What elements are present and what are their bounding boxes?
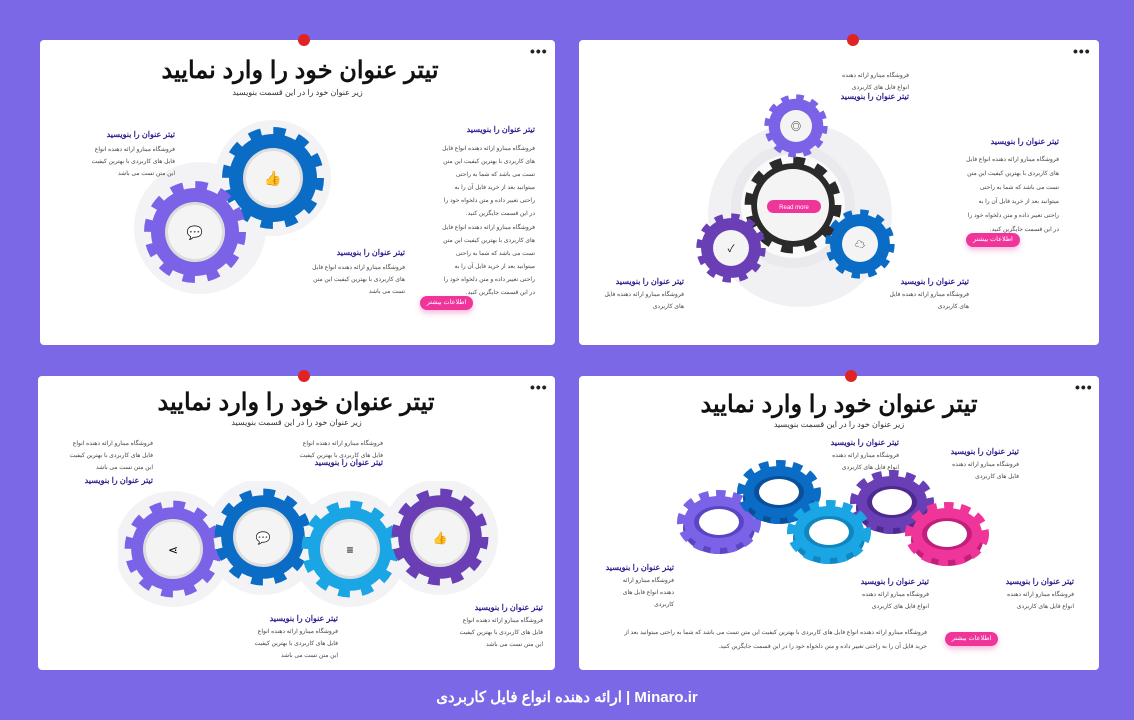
panel: bottom-left slide: تیتر عنوان را بنویسید — [475, 603, 543, 612]
text block top-middle — [830, 438, 899, 471]
panel: bottom-right slide: تیتر عنوان را بنویسید — [1006, 577, 1074, 586]
menu dots: ••• — [1075, 379, 1093, 395]
panel: top-right slide: تیتر عنوان را بنویسید — [901, 277, 969, 286]
panel: bottom-right slide: فروشگاه مینارو ارائه دهنده انواع فایل های کاربردی — [862, 592, 929, 610]
panel: bottom-right slide — [579, 376, 1099, 670]
button — [966, 233, 1020, 247]
gears chart: ≡ — [346, 543, 354, 557]
panel: bottom-left slide: تیتر عنوان را بنویسید — [315, 458, 383, 467]
button: اطلاعات بیشتر — [427, 299, 466, 306]
button — [945, 632, 998, 646]
gears chart: ⋖ — [168, 543, 178, 557]
panel: top-left slide: تیتر عنوان را بنویسید — [337, 248, 405, 257]
panel: top-right slide: فروشگاه مینارو ارائه دهنده انواع فایل های کاربردی — [842, 73, 909, 91]
footer: Minaro.ir | ارائه دهنده انواع فایل کاربردی — [436, 689, 698, 706]
panel: top-right slide: فروشگاه مینارو ارائه دهنده انواع فایل های کاربردی با بهترین کیفیت این متن تست می باشد که شما به راحتی میتوانید بعد از خرید فایل آن را به راحتی تغییر داده و متن دلخواه خود را در این قسمت جایگزین کنید. — [966, 157, 1059, 233]
panel: bottom-left slide: فروشگاه مینارو ارائه دهنده انواع فایل های کاربردی با بهترین کیفیت — [299, 441, 383, 459]
panel: top-left slide: فروشگاه مینارو ارائه دهنده انواع فایل های کاربردی با بهترین کیفیت این متن تست می باشد — [91, 147, 175, 177]
text block bottom-middle — [860, 577, 929, 610]
gears chart: 👍 — [433, 531, 447, 545]
panel: bottom-right slide: تیتر عنوان را بنویسید — [606, 563, 674, 572]
text block top-middle — [299, 440, 383, 468]
panel: bottom-left slide: تیتر عنوان را بنویسید — [85, 476, 153, 485]
subtitle: زیر عنوان خود را در این قسمت بنویسید — [232, 88, 363, 97]
panel: top-left slide: تیتر عنوان را بنویسید — [107, 130, 175, 139]
title: تیتر عنوان خود را وارد نمایید — [161, 57, 439, 84]
text block left — [91, 130, 175, 177]
text block right — [442, 125, 535, 296]
panel: top-right slide: فروشگاه مینارو ارائه دهنده فایل های کاربردی — [605, 292, 684, 310]
menu dots: ••• — [530, 379, 548, 395]
gears chart: ◎ — [791, 121, 801, 133]
panel: bottom-right slide: فروشگاه مینارو ارائه دهنده انواع فایل های کاربردی — [1007, 592, 1074, 610]
subtitle: زیر عنوان خود را در این قسمت بنویسید — [231, 418, 362, 427]
panel: top-left slide: تیتر عنوان را بنویسید — [467, 125, 535, 134]
panel: bottom-right slide: تیتر عنوان را بنویسید — [861, 577, 929, 586]
pin — [298, 370, 310, 382]
panel: bottom-left slide: فروشگاه مینارو ارائه دهنده انواع فایل های کاربردی با بهترین کیفیت این متن تست می باشد — [459, 618, 543, 648]
title: تیتر عنوان خود را وارد نمایید — [700, 391, 978, 418]
panel: bottom-left slide: فروشگاه مینارو ارائه دهنده انواع فایل های کاربردی با بهترین کیفیت این متن تست می باشد — [254, 629, 338, 659]
panel: top-left slide: فروشگاه مینارو ارائه دهنده انواع فایل های کاربردی با بهترین کیفیت این متن تست می باشد که شما به راحتی میتوانید بعد از خرید فایل آن را به راحتی تغییر داده و متن دلخواه خود را در این قسمت جایگزین کنید. — [442, 225, 535, 296]
text block top — [840, 72, 909, 102]
gears chart — [134, 120, 331, 294]
title: تیتر عنوان خود را وارد نمایید — [157, 389, 435, 416]
gears chart: 💬 — [256, 531, 271, 545]
panel: top-right slide: تیتر عنوان را بنویسید — [616, 277, 684, 286]
panel: bottom-right slide: فروشگاه مینارو ارائه دهنده فایل های کاربردی — [952, 462, 1019, 480]
panel: top-right slide — [579, 40, 1099, 345]
panel: top-left slide — [40, 40, 555, 345]
gears chart: ✓ — [728, 244, 735, 255]
button: اطلاعات بیشتر — [952, 635, 991, 642]
paragraph bottom: فروشگاه مینارو ارائه دهنده انواع فایل های کاربردی با بهترین کیفیت این متن تست می باشد که شما به راحتی میتوانید بعد از خرید فایل آن را به راحتی تغییر داده و متن دلخواه خود را در این قسمت جایگزین کنید. — [624, 630, 927, 650]
panel: bottom-left slide: فروشگاه مینارو ارائه دهنده انواع فایل های کاربردی با بهترین کیفیت این متن تست می باشد — [69, 441, 153, 471]
panel: top-right slide: فروشگاه مینارو ارائه دهنده فایل های کاربردی — [890, 292, 969, 310]
button: اطلاعات بیشتر — [973, 236, 1013, 243]
pin — [845, 370, 857, 382]
panel: bottom-right slide: فروشگاه مینارو ارائه دهنده انواع فایل های کاربردی — [623, 578, 674, 608]
gears chart: ☁ — [855, 240, 865, 251]
panel: bottom-left slide: تیتر عنوان را بنویسید — [270, 614, 338, 623]
gears chart: Read more — [779, 205, 810, 211]
panel: bottom-right slide: تیتر عنوان را بنویسید — [831, 438, 899, 447]
panel: bottom-right slide: تیتر عنوان را بنویسید — [951, 447, 1019, 456]
3D gears chart — [677, 460, 989, 566]
gears chart: 💬 — [187, 225, 203, 240]
text block bottom-right — [1006, 577, 1074, 610]
gears chart — [696, 94, 895, 307]
menu dots: ••• — [530, 43, 548, 59]
text block bottom-right — [890, 277, 969, 310]
gears chart: 👍 — [264, 170, 282, 187]
panel: top-left slide: فروشگاه مینارو ارائه دهنده انواع فایل های کاربردی با بهترین کیفیت این متن تست می باشد که شما به راحتی میتوانید بعد از خرید فایل آن را به راحتی تغییر داده و متن دلخواه خود را در این قسمت جایگزین کنید. — [442, 146, 535, 217]
pin — [298, 34, 310, 46]
panel: top-right slide: تیتر عنوان را بنویسید — [841, 92, 909, 101]
text block bottom-left — [606, 563, 674, 608]
panel: top-left slide: فروشگاه مینارو ارائه دهنده انواع فایل های کاربردی با بهترین کیفیت این متن تست می باشد — [312, 265, 405, 295]
panel: bottom-right slide: فروشگاه مینارو ارائه دهنده انواع فایل های کاربردی — [832, 453, 899, 471]
button — [420, 296, 473, 310]
panel: bottom-left slide — [38, 376, 555, 670]
text block top-left — [69, 440, 153, 486]
subtitle: زیر عنوان خود را در این قسمت بنویسید — [774, 420, 904, 429]
panel: top-right slide: تیتر عنوان را بنویسید — [991, 137, 1059, 146]
gears chart — [118, 481, 498, 607]
text block bottom-left — [604, 277, 684, 310]
text block bottom middle — [312, 248, 405, 295]
menu dots: ••• — [1073, 43, 1091, 59]
pin — [847, 34, 859, 46]
text block right — [966, 137, 1059, 233]
text block bottom-middle — [254, 614, 338, 659]
text block bottom-right — [459, 603, 543, 648]
text block top-right — [950, 447, 1019, 480]
